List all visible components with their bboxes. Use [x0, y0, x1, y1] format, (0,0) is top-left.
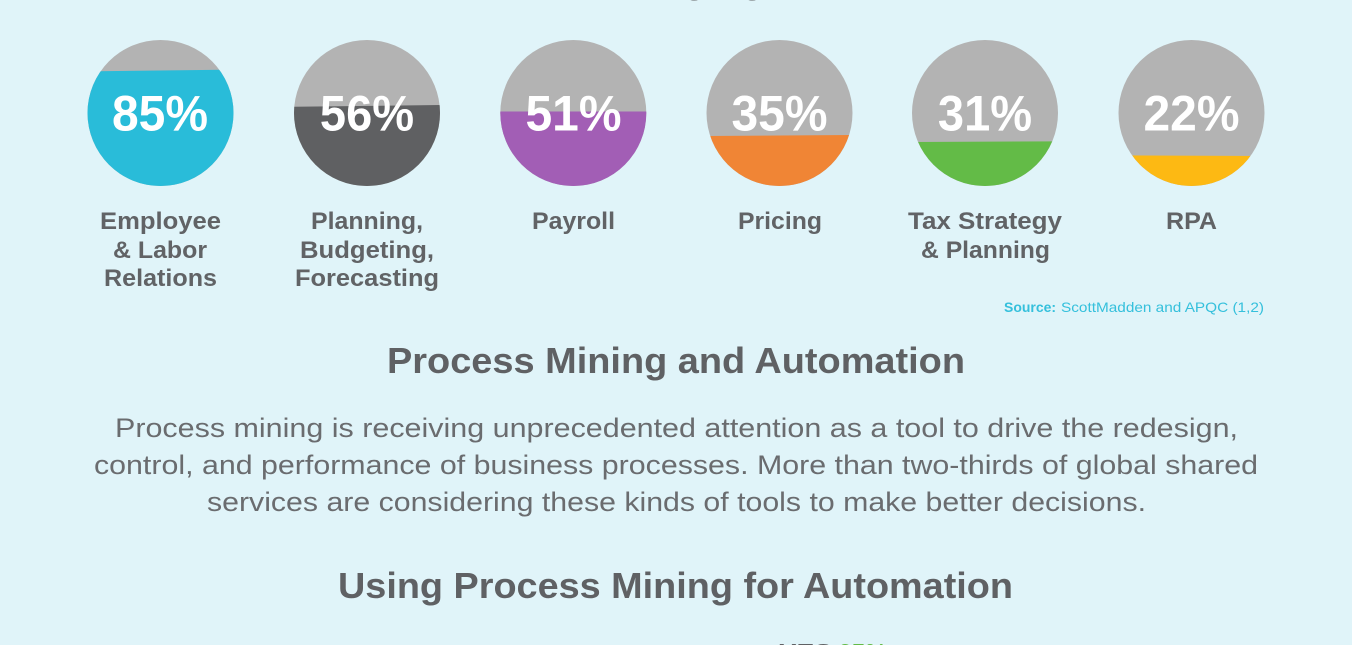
gauge: Pricing 35% [706, 40, 852, 186]
label: Tax Strategy & Planning: & Planning [921, 237, 1050, 264]
gauge: Employee & Labor Relations 85%: 85% [112, 87, 208, 142]
source note: Source: [1004, 299, 1056, 315]
label: Tax Strategy & Planning [908, 208, 1063, 264]
label: Employee & Labor Relations: & Labor [113, 237, 207, 264]
gauge: RPA 22% [1118, 40, 1264, 186]
gauge: Planning, Budgeting, Forecasting 56%: 56% [320, 86, 414, 142]
label: Employee & Labor Relations: Employee [100, 208, 221, 235]
paragraph: process mining: services are considering these kinds of tools to make better decisions. [207, 487, 1146, 517]
gauge: Tax Strategy & Planning 31% [912, 40, 1058, 186]
label: Employee & Labor Relations [100, 208, 221, 292]
label: RPA: RPA [1166, 208, 1217, 235]
label: Planning, Budgeting, Forecasting: Forecasting [295, 265, 439, 292]
gauge: Payroll 51% [495, 40, 650, 190]
source note: ScottMadden and APQC (1,2) [1061, 299, 1264, 315]
paragraph: process mining [94, 413, 1258, 517]
paragraph: process mining: control, and performance of business processes. More than two-thirds of global shared [94, 450, 1258, 480]
gauge: RPA 22%: 22% [1143, 87, 1240, 142]
label: Planning, Budgeting, Forecasting [295, 208, 439, 292]
label: Planning, Budgeting, Forecasting: Planning, [311, 208, 423, 235]
gauge: Tax Strategy & Planning 31%: 31% [938, 86, 1032, 142]
label: Tax Strategy & Planning: Tax Strategy [908, 208, 1063, 235]
label: Planning, Budgeting, Forecasting: Budgeting, [300, 237, 434, 264]
label: Pricing: Pricing [738, 208, 822, 235]
gauge: Payroll 51%: 51% [525, 87, 622, 142]
gauge: Employee & Labor Relations 85% [88, 40, 234, 186]
heading: Process Mining and Automation: Process Mining and Automation [387, 340, 965, 381]
label: Payroll: Payroll [532, 208, 615, 235]
label: Employee & Labor Relations: Relations [104, 265, 217, 292]
heading: Using Process Mining for Automation: Using Process Mining for Automation [338, 565, 1013, 606]
paragraph: process mining: Process mining is receiving unprecedented attention as a tool to drive the redesign, [115, 413, 1238, 443]
gauge: Pricing 35%: 35% [731, 87, 828, 142]
gauge: Planning, Budgeting, Forecasting 56% [290, 40, 445, 190]
